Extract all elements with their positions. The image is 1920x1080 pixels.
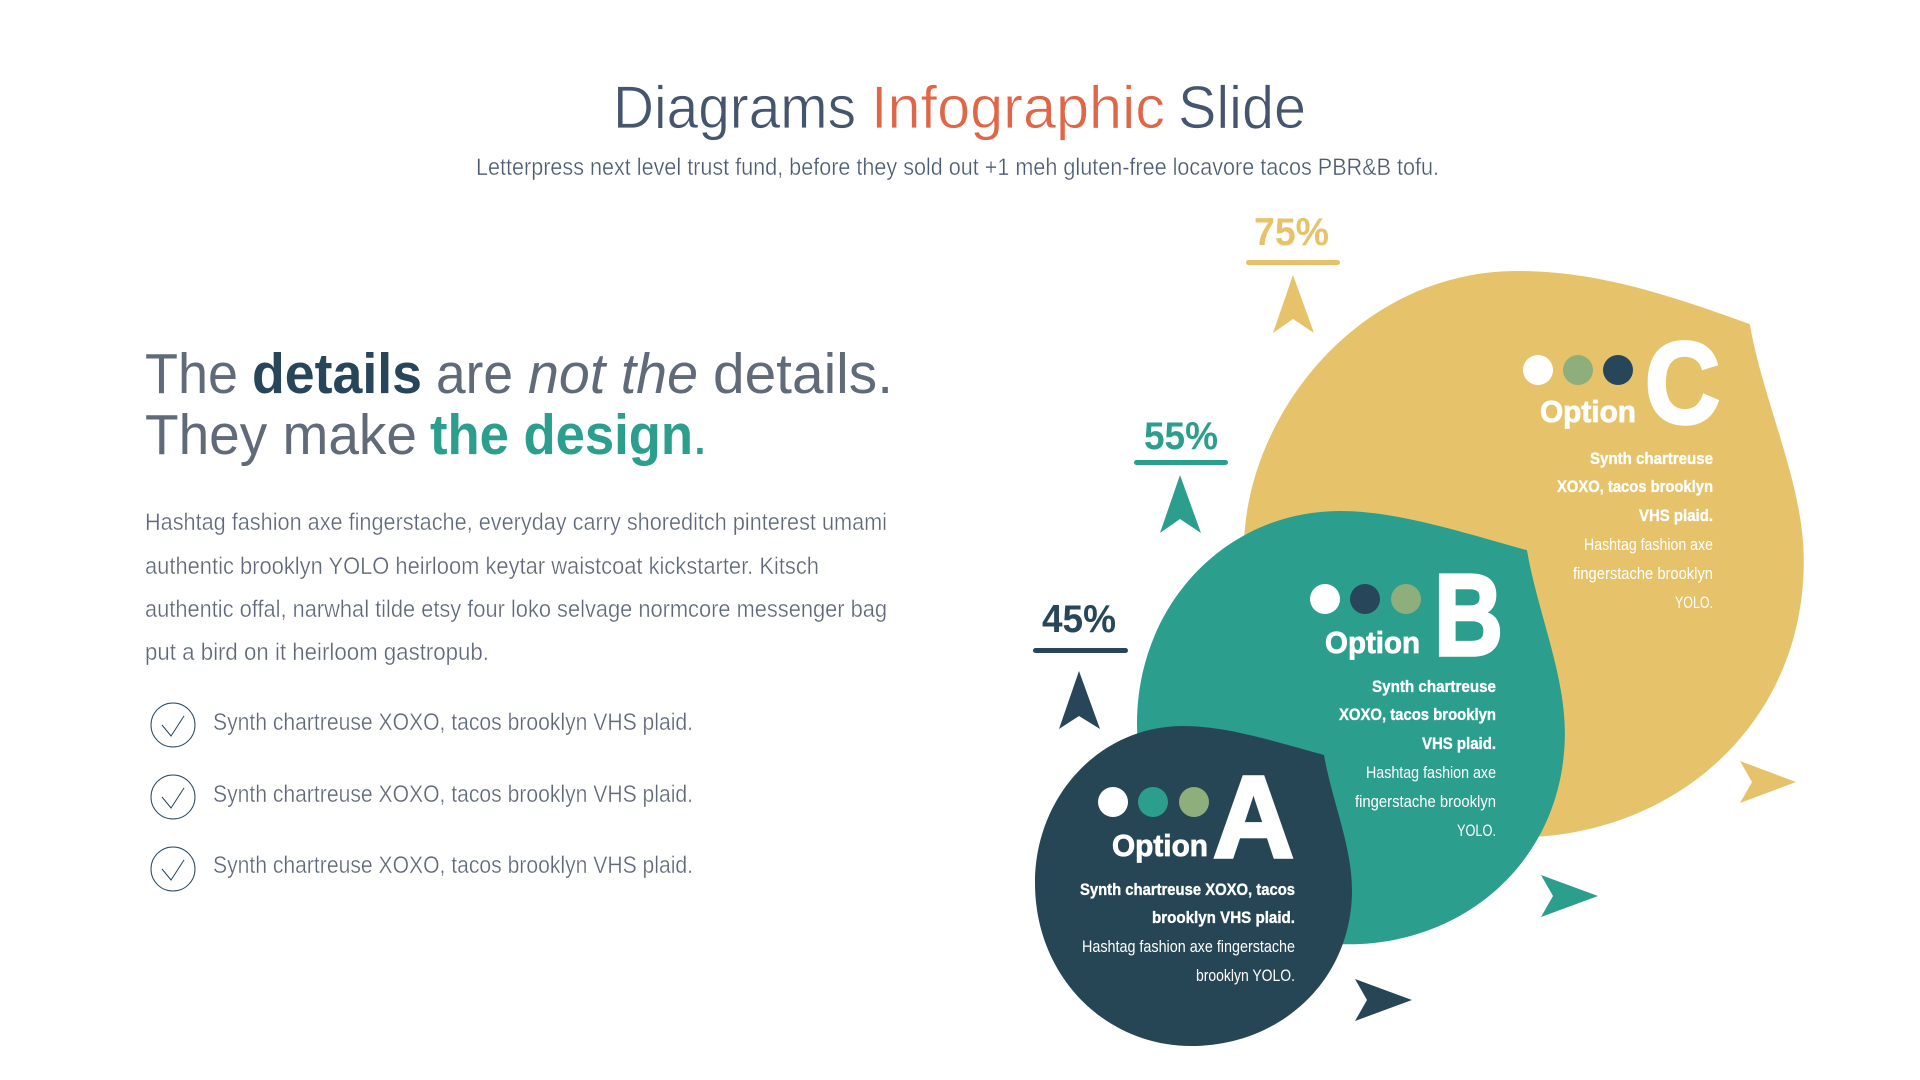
heading: They make: [145, 403, 417, 467]
text B: Synth chartreuse: [1372, 677, 1496, 696]
metric: 75%: 75%: [1254, 211, 1329, 254]
label C: [1540, 318, 1720, 448]
body paragraph: [145, 509, 887, 666]
blob C: [1244, 271, 1804, 837]
title: Slide: [1178, 74, 1306, 141]
title: Diagrams: [613, 74, 856, 141]
arrow: navy: [1355, 979, 1412, 1021]
heading: The: [145, 342, 238, 406]
label B: B: [1434, 550, 1503, 680]
text B: fingerstache brooklyn: [1355, 792, 1496, 811]
text B: XOXO, tacos brooklyn: [1339, 705, 1496, 724]
label C: Option: [1540, 394, 1636, 429]
title: [613, 74, 1306, 141]
check item 3: Synth chartreuse XOXO, tacos brooklyn VHS plaid.: [213, 852, 693, 879]
body paragraph: put a bird on it heirloom gastropub.: [145, 639, 489, 666]
metric: 45%: 45%: [1042, 598, 1116, 641]
check item 1: Synth chartreuse XOXO, tacos brooklyn VHS plaid.: [213, 709, 693, 736]
heading: the design: [430, 403, 693, 467]
heading: not the: [528, 342, 698, 406]
text C: Hashtag fashion axe: [1584, 535, 1713, 554]
check item 2: Synth chartreuse XOXO, tacos brooklyn VHS plaid.: [213, 781, 693, 808]
panel: option C: [1244, 271, 1804, 837]
label B: [1325, 550, 1503, 680]
text B: [1339, 677, 1496, 840]
checklist: [151, 703, 693, 891]
text C: Synth chartreuse: [1590, 449, 1713, 468]
body paragraph: Hashtag fashion axe fingerstache, everyday carry shoreditch pinterest umami: [145, 509, 887, 536]
dots C: [1523, 355, 1633, 385]
check item 3: [151, 847, 693, 891]
metric: 45%: [1033, 598, 1128, 729]
blob A: [1035, 726, 1352, 1046]
check item 2: [151, 775, 693, 819]
label C: C: [1645, 318, 1720, 448]
heading: details: [252, 342, 422, 406]
blob B: [1137, 511, 1565, 944]
text A: brooklyn VHS plaid.: [1152, 908, 1295, 927]
text C: fingerstache brooklyn: [1573, 564, 1713, 583]
text C: YOLO.: [1675, 593, 1713, 612]
text C: XOXO, tacos brooklyn: [1557, 477, 1713, 496]
arrow: gold: [1740, 761, 1796, 803]
panel: option A: [1035, 726, 1352, 1046]
label A: [1112, 752, 1294, 882]
check item 1: [151, 703, 693, 747]
text B: YOLO.: [1457, 821, 1496, 840]
panel: option B: [1137, 511, 1565, 944]
title: Infographic: [871, 74, 1165, 141]
text C: VHS plaid.: [1639, 506, 1713, 525]
text B: VHS plaid.: [1422, 734, 1496, 753]
dots A: [1098, 787, 1209, 817]
body paragraph: authentic offal, narwhal tilde etsy four loko selvage normcore messenger bag: [145, 596, 887, 623]
text A: Synth chartreuse XOXO, tacos: [1080, 880, 1295, 899]
heading: .: [692, 403, 708, 467]
arrow: teal: [1541, 875, 1598, 917]
dots B: [1310, 584, 1421, 614]
text A: Hashtag fashion axe fingerstache: [1082, 937, 1295, 956]
metric: 55%: [1134, 415, 1228, 533]
label A: Option: [1112, 828, 1208, 863]
heading: are: [436, 342, 513, 406]
subtitle: Letterpress next level trust fund, before they sold out +1 meh gluten-free locavore tacos PBR&B tofu.: [476, 154, 1439, 181]
text C: [1557, 449, 1713, 612]
label B: Option: [1325, 625, 1420, 660]
metric: 75%: [1246, 211, 1340, 333]
heading: [145, 342, 893, 467]
text A: [1080, 880, 1295, 985]
text B: Hashtag fashion axe: [1366, 763, 1496, 782]
heading: details.: [713, 342, 893, 406]
body paragraph: authentic brooklyn YOLO heirloom keytar waistcoat kickstarter. Kitsch: [145, 553, 819, 580]
text A: brooklyn YOLO.: [1196, 966, 1295, 985]
label A: A: [1213, 752, 1294, 882]
metric: 55%: 55%: [1144, 415, 1218, 458]
